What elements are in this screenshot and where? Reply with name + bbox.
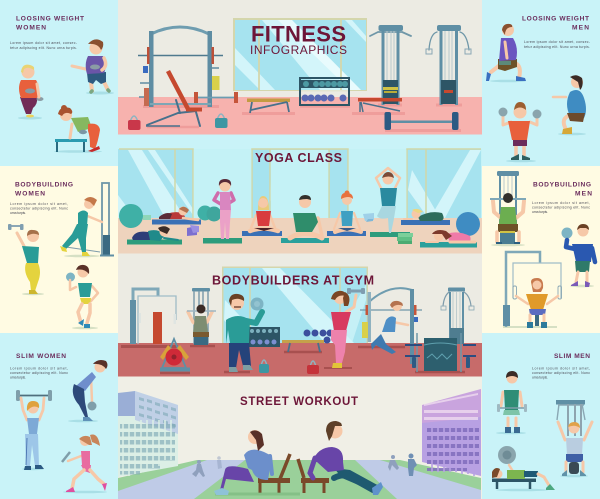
icon: teal ball	[119, 204, 143, 228]
wall and floor	[118, 254, 482, 376]
bench small	[282, 340, 324, 352]
panel: bodybuilding men	[490, 171, 595, 328]
figure: big man teal	[224, 294, 264, 372]
heading: BODYBUILDERS AT GYM	[212, 274, 374, 288]
text block: Lorem ipsum dolor sit amet,	[532, 201, 590, 205]
heading: YOGA CLASS	[255, 151, 342, 165]
figure: woman overhead barbell	[16, 390, 52, 470]
heading second line: WOMEN	[15, 190, 45, 198]
figure: bent woman deadlift	[68, 360, 108, 422]
figure: woman orange top	[18, 65, 44, 120]
title: FITNESS	[251, 22, 346, 46]
panel: bodybuilding women	[8, 182, 114, 329]
road	[118, 460, 481, 499]
heading: BODYBUILDING	[533, 182, 591, 188]
panel: slim women	[10, 353, 108, 493]
red bench	[352, 98, 405, 114]
figure: man lying on green mat	[127, 226, 182, 244]
heading: BODYBUILDING	[15, 182, 73, 188]
text block: Lorem ipsum dolor sit amet,	[10, 366, 68, 370]
dumbbell rack left	[246, 327, 280, 347]
text block: tetur adipiscing elit. Nunc urna turpis.	[524, 45, 590, 49]
text block: urna turpis.	[532, 210, 548, 214]
heading: LOOSING WEIGHT	[16, 16, 84, 22]
blocks green	[143, 215, 151, 220]
text block: urna turpis.	[532, 376, 548, 380]
heading: SLIM MEN	[554, 353, 590, 360]
icon: blue ball	[456, 212, 480, 236]
figure: squatting man	[553, 75, 586, 135]
icon: blue blocks	[363, 213, 374, 222]
icon: green blocks	[397, 233, 413, 244]
cable station with red column	[121, 289, 178, 346]
mirror	[233, 18, 367, 91]
heading: STREET WORKOUT	[240, 396, 358, 408]
dumbbell rack right	[304, 330, 334, 344]
power rack	[138, 27, 238, 107]
bench and woman	[214, 430, 300, 495]
figure: man with dumbbells	[498, 102, 542, 162]
figure: man at chest machine	[556, 400, 592, 477]
figure: seated woman red	[242, 196, 282, 236]
text block	[10, 202, 68, 215]
dumbbell rack	[300, 78, 350, 106]
heading: SLIM WOMEN	[16, 353, 66, 360]
wall and floor	[118, 149, 482, 254]
figure: woman lying on blue mat	[152, 206, 201, 224]
figure: seated woman blue	[327, 190, 366, 236]
text block	[532, 366, 590, 380]
lat machine with man	[187, 288, 216, 346]
figure: man with barbell	[496, 371, 527, 434]
windows	[118, 149, 481, 218]
text block: Lorem ipsum dolor sit amet, consec-	[10, 41, 78, 45]
panel: loosing weight women	[10, 16, 114, 153]
kettlebell teal	[215, 114, 228, 128]
heading second line: MEN	[575, 190, 592, 198]
text block: Lorem ipsum dolor sit amet,	[532, 366, 590, 370]
flat bench	[242, 98, 295, 114]
figure: standing woman pink	[203, 179, 242, 244]
text block: urna turpis.	[10, 376, 26, 380]
power rack with woman	[358, 288, 422, 364]
text block: consectetur adipiscing elit. Nunc	[10, 206, 68, 210]
subtitle: INFOGRAPHICS	[250, 43, 347, 57]
panel: yoga class	[118, 149, 482, 254]
heading: LOOSING WEIGHT	[522, 16, 589, 22]
panel: street workout	[118, 376, 482, 499]
floor barbell	[384, 112, 461, 130]
figure: woman on bench	[54, 105, 102, 153]
icon: distant runners	[192, 454, 417, 477]
right building	[422, 389, 481, 476]
heading second line: MEN	[572, 24, 589, 32]
figure: woman at cable post	[60, 183, 114, 257]
icon: two teal balls	[198, 206, 222, 222]
text block	[524, 40, 591, 49]
bench press station	[405, 333, 476, 372]
heading second line: WOMEN	[16, 24, 46, 32]
figure: tree pose woman	[370, 168, 410, 237]
panel: bodybuilders at gym	[118, 254, 482, 376]
figure: man in blue	[562, 224, 595, 287]
text block: Lorem ipsum dolor sit amet,	[10, 202, 68, 206]
figure: woman at pulldown	[503, 252, 562, 328]
machine with man behind bar	[490, 171, 526, 246]
figure: woman raising dumbbell	[8, 224, 44, 295]
text block: consectetur adipiscing elit. Nunc	[532, 206, 590, 210]
kettlebell teal	[259, 360, 269, 373]
cable machine gym	[441, 288, 474, 344]
bench and man	[298, 421, 383, 495]
text block: consectetur adipiscing elit. Nunc	[532, 371, 590, 375]
sky and ground	[118, 376, 482, 499]
figure: lying woman pink	[420, 230, 477, 248]
wall and floor	[118, 0, 482, 134]
text block: tetur adipiscing elit. Nunc urna turpis.	[10, 46, 77, 50]
figure: woman purple top	[72, 39, 114, 94]
figure: man on bench press	[492, 446, 555, 491]
figure: lying woman blonde	[401, 209, 450, 225]
panel: loosing weight men	[486, 16, 591, 162]
kettlebell red	[128, 116, 140, 130]
mirror	[222, 266, 368, 343]
figure: lunging man	[486, 24, 526, 82]
panel: slim men	[492, 353, 592, 491]
text block: consectetur adipiscing elit. Nunc	[10, 371, 68, 375]
text block: Lorem ipsum dolor sit amet, consec-	[524, 40, 591, 44]
icon: purple blocks	[187, 225, 199, 236]
figure: woman pink	[324, 288, 365, 368]
panel: gym interior with title	[118, 0, 482, 134]
figure: woman curling dumbbell	[66, 265, 98, 329]
plate loader	[160, 339, 190, 373]
left building	[118, 391, 178, 477]
figure: seated man green	[281, 195, 329, 243]
incline bench	[146, 70, 202, 127]
cable machine two	[426, 25, 471, 105]
figure: lunging woman	[62, 434, 107, 493]
text block: urna turpis.	[10, 211, 26, 215]
text block	[10, 366, 68, 380]
kettlebell red	[307, 361, 319, 374]
cable machine one	[370, 25, 411, 105]
text block	[532, 201, 590, 214]
text block	[10, 41, 78, 50]
